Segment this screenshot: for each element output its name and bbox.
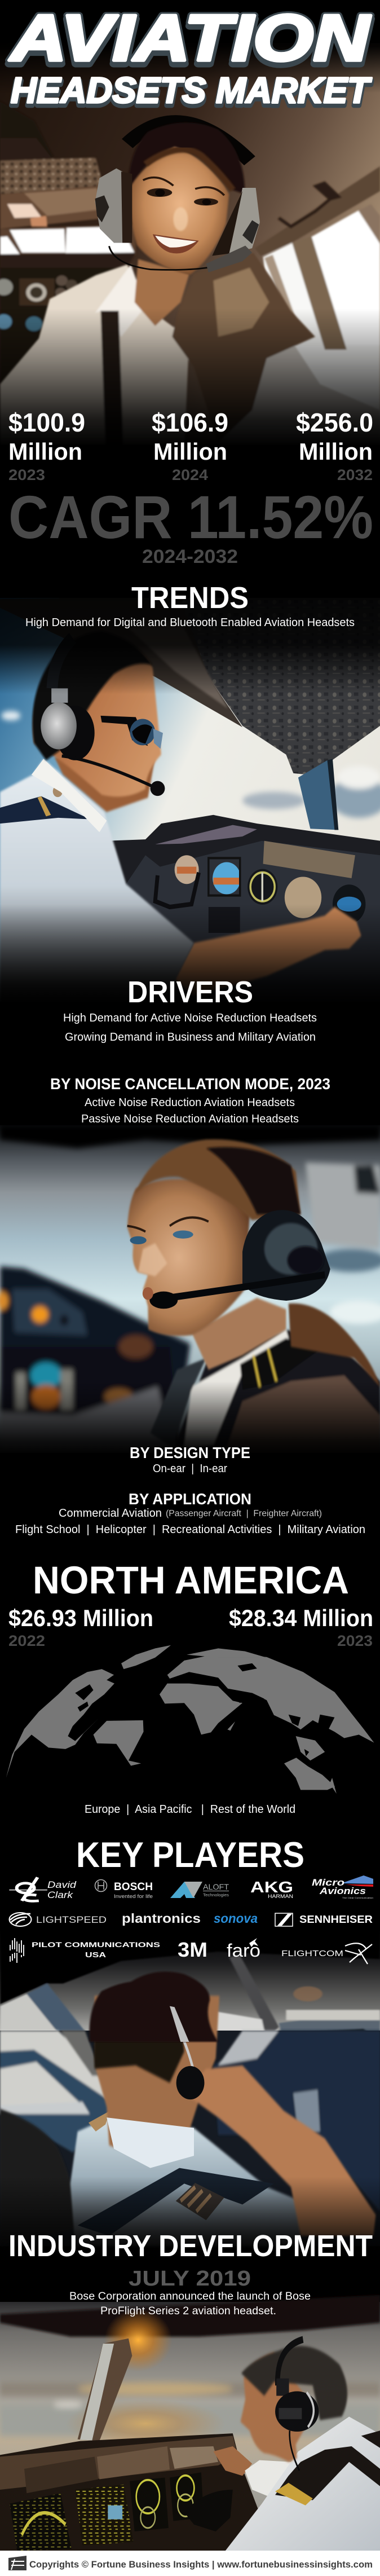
segment list [81,1097,299,1125]
photo: female pilot in profile with microphone [0,1125,380,1459]
value 2023 [229,1605,373,1649]
logo: 3M: 3M [178,1938,207,1961]
pilot hair from behind [89,1972,218,2042]
value 2023: $28.34 Million [229,1605,373,1631]
CAGR figure: 2024-2032 [142,546,238,567]
logo: Flightcom: FLIGHTCOM [281,1949,343,1958]
title: AVIATION: AVIATION [8,1,371,74]
logo: Micro Avionics: Micro [312,1877,344,1888]
logo: AKG [250,1878,293,1899]
logo: Bosch: BOSCH [114,1881,153,1893]
dashboard [0,2433,274,2551]
neck [192,1298,286,1370]
logo: Pilot Communications USA [10,1938,160,1963]
market size stats [8,408,373,483]
heading: noise cancellation: BY NOISE CANCELLATION MODE, 2023 [50,1075,330,1093]
windscreen post [78,2339,132,2441]
trends section [25,581,355,629]
map: seas and lakes [75,1663,334,1756]
eyes, brows and lips [127,1217,209,1300]
development text: ProFlight Series 2 aviation headset. [100,2305,276,2317]
stat 2024 [152,408,228,483]
segment list: On-ear | In-ear [153,1463,227,1475]
driver text [63,1012,317,1043]
sunglasses [100,716,163,749]
stat 2032: $256.0 [296,408,373,437]
title: AVIATION: AVIATION [8,5,371,78]
logo: Aloft Technologies [170,1882,229,1898]
value 2022: $26.93 Million [8,1605,153,1631]
logo: Micro Avionics [312,1875,373,1899]
neck and face [55,758,155,812]
logo: Plantronics: plantronics [122,1911,201,1926]
top fade [0,43,380,90]
logo: Sennheiser [275,1913,373,1926]
logo: Faro: faro [227,1940,260,1961]
seat belt and shoulder stripes [78,2111,274,2236]
title: HEADSETS MARKET: HEADSETS MARKET [11,70,372,111]
headset [275,2340,319,2471]
heading: north america: NORTH AMERICA [33,1558,349,1602]
pilot shirt [0,759,194,1014]
logo: Micro Avionics: Avionics [319,1886,366,1896]
pilot arm and hand [184,2066,375,2236]
segment list: Active Noise Reduction Aviation Headsets [85,1097,295,1109]
logo: Flightcom [281,1943,372,1964]
logo: Pilot Communications USA: USA [85,1950,107,1959]
commercial aviation line: Commercial Aviation [59,1507,162,1520]
hair [129,122,246,194]
pilot seat [0,2107,69,2183]
logo: Sennheiser: SENNHEISER [299,1914,373,1925]
driver text: Growing Demand in Business and Military Aviation [65,1031,316,1043]
copyright text: Copyrights © Fortune Business Insights | www.fortunebusinessinsights.com [29,2559,373,2570]
pilot neck and head [95,1996,219,2159]
drivers section [63,975,317,1043]
commercial aviation line: (Passenger Aircraft | Freighter Aircraft) [166,1509,322,1518]
photo: pilot at sunset dashboard [0,2295,380,2552]
value 2022 [8,1605,153,1649]
headset earpiece [176,2027,204,2099]
regional: North America [8,1558,373,1649]
stat 2023: Million [8,438,82,465]
facial features [143,178,224,253]
headset [149,1210,330,1309]
stat 2032 [296,408,373,483]
jacket and shoulder [151,1329,380,1459]
title: AVIATION: AVIATION [8,1,371,74]
dashboard [107,815,380,1014]
logo: Micro Avionics: The Clear Communication [342,1896,373,1899]
value 2022: 2022 [8,1632,45,1649]
design type segment [130,1444,250,1475]
logo: Bosch [95,1879,153,1900]
heading: design type: BY DESIGN TYPE [130,1444,250,1461]
bottom fade [0,309,380,447]
logo: Aloft Technologies: ALOFT [203,1882,229,1891]
dark text band [0,2256,380,2307]
logo: Aloft Technologies: Technologies [203,1892,229,1897]
face [130,147,229,275]
industry development section [8,2229,373,2317]
noise cancellation mode segment [50,1075,330,1125]
logo: David Clark [9,1877,77,1901]
heading: drivers: DRIVERS [127,975,253,1009]
ponytail [289,1304,380,1387]
logo: Lightspeed: LIGHTSPEED [36,1914,107,1925]
logo: David Clark: David [47,1879,77,1890]
photo: female pilot with headset in cockpit [0,47,380,438]
shirt and torso [0,253,380,453]
logo: Bosch: Invented for life [114,1894,153,1900]
title [8,1,372,113]
sun glow [104,2309,172,2371]
date: JULY 2019 [129,2267,251,2291]
application segment [15,1490,365,1536]
pilot hand on panel [213,2446,252,2476]
stat 2024: $106.9 [152,408,228,437]
key players section [9,1835,373,1964]
bottom fade [0,1381,380,1456]
headset [41,638,165,796]
stat 2032: Million [299,438,373,465]
world map [6,1645,374,1794]
development text [69,2291,311,2317]
hair [135,1139,301,1220]
segment list: Passive Noise Reduction Aviation Headsets [81,1113,299,1125]
development text: Bose Corporation announced the launch of Bose [69,2291,311,2302]
title: HEADSETS MARKET: HEADSETS MARKET [11,73,372,113]
heading: key players: KEY PLAYERS [76,1835,304,1875]
footer bar [0,2551,380,2576]
headset headband [127,122,250,161]
hair strands over forehead [145,149,233,190]
face [127,1179,250,1336]
value 2023: 2023 [337,1632,373,1649]
stat 2024: Million [153,438,227,465]
pilot arm and hand [175,907,361,996]
other applications: Flight School | Helicopter | Recreational Activities | Military Aviation [15,1523,365,1536]
logo: Sonova: sonova [214,1911,258,1926]
stat 2023: $100.9 [8,408,85,437]
overhead structure [0,2295,380,2337]
top fade [0,596,380,694]
heading: trends: TRENDS [131,581,249,615]
logo: Lightspeed [9,1913,107,1926]
photo: pilot adjusting headset from behind [0,1929,380,2257]
overhead panel [0,596,380,776]
logo: AKG: HARMAN [268,1894,293,1899]
pilot sleeve and uniform [226,2417,380,2551]
footer logo [8,2556,26,2570]
windscreen post [298,760,338,830]
logo: AKG: AKG [250,1878,293,1896]
pilot head [241,2352,315,2462]
stat 2032: 2032 [337,466,373,483]
pilot shirt [70,2117,301,2246]
stat 2023 [8,408,85,483]
heading: application: BY APPLICATION [129,1490,251,1508]
stat 2023: 2023 [8,466,45,483]
bottom fade [0,904,380,1005]
logo: Pilot Communications USA: PILOT COMMUNICATIONS [32,1941,160,1949]
hair [32,631,153,760]
other regions: Europe | Asia Pacific | Rest of the World [85,1803,295,1816]
driver text: High Demand for Active Noise Reduction Headsets [63,1012,317,1024]
commercial aviation line [59,1507,322,1520]
trend text: High Demand for Digital and Bluetooth Enabled Aviation Headsets [25,617,355,629]
headset ear cups [95,169,260,272]
logo: David Clark: Clark [47,1890,74,1900]
fade into text band [0,2177,380,2257]
stat 2024: 2024 [172,466,208,483]
photo: male pilot in sunglasses at the controls [0,596,380,1014]
